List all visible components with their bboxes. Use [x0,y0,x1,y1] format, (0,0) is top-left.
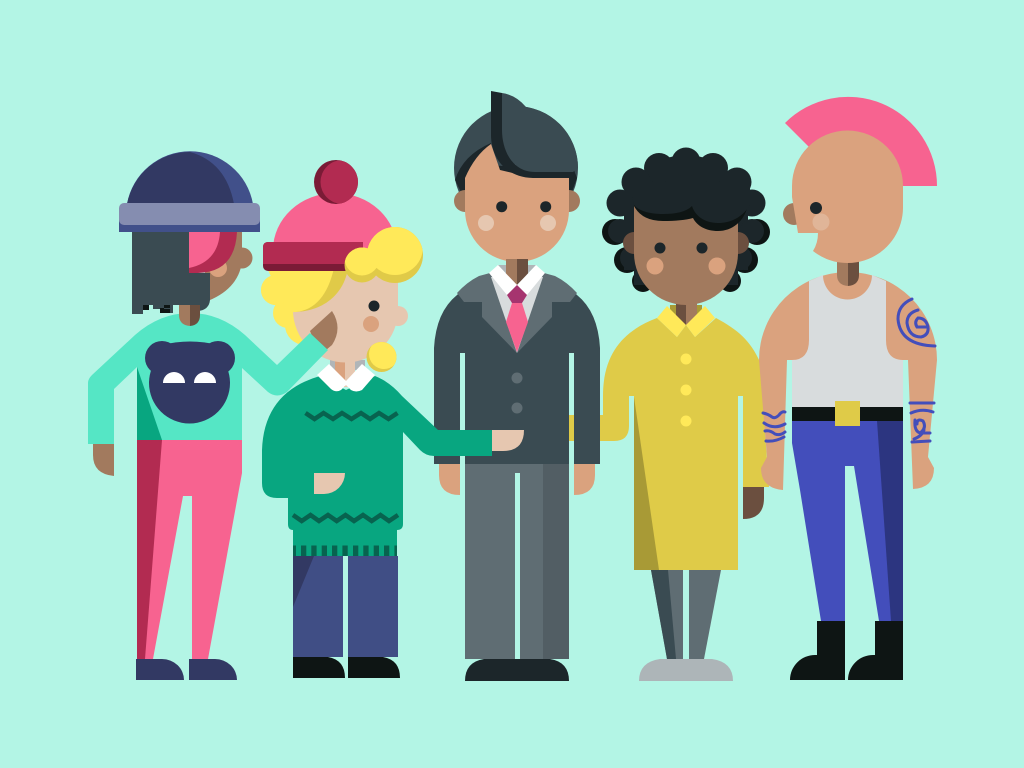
trousers [293,556,398,657]
cheeks [478,215,556,231]
beanie band [119,203,260,232]
illustration: five characters [88,91,937,681]
hand on face [310,311,338,355]
lapels [457,273,577,353]
sweater hem stripes [293,546,397,556]
skin: shoulders and arms [759,272,937,490]
shoes [639,659,733,681]
neck [179,305,200,326]
tattoo: shoulder spiral [898,299,935,346]
face [465,144,569,262]
coat shadow [634,397,659,570]
outstretched hand [492,430,524,451]
right hair curls [344,227,423,283]
belt [792,407,903,421]
eyes [654,242,708,254]
boots [790,621,903,680]
tie [506,285,528,352]
hat band [263,242,363,271]
legs [651,570,721,659]
shoes [293,657,400,678]
shirt collar [317,364,375,392]
ears [623,232,749,254]
trousers [792,421,903,621]
jacket [434,273,600,464]
pink hair streak [189,232,237,273]
character 2: blonde person in green sweater [261,160,524,678]
eyes [496,201,551,212]
shoes [136,659,237,680]
neck [837,258,859,286]
eye [810,202,822,214]
hands [439,463,595,495]
shoes [465,659,569,681]
neck [498,259,536,285]
cheeks [646,258,726,274]
trouser shadow [137,440,162,659]
eye [368,300,380,312]
hair back [454,106,578,230]
tank top [792,275,903,407]
character 4: woman in yellow coat [569,148,770,681]
ears [454,190,580,212]
buttons [680,354,692,426]
beanie dome [127,151,253,204]
neck and collar back [670,300,702,326]
character 1: person with beanie and bear sweater [88,151,338,680]
hat dome [273,193,397,250]
bear print [145,341,235,424]
curly hair back [602,148,770,292]
hair front [261,268,348,312]
trousers [465,463,569,659]
face [634,200,738,305]
hat pompom [314,160,358,204]
fringe [630,185,750,231]
ear [232,248,252,268]
quiff [491,91,578,178]
ear [388,306,408,326]
zigzag pattern top [306,413,398,419]
trouser shadow [877,421,903,621]
neck [330,355,365,387]
tattoo: left forearm waves [763,412,785,441]
dark hair [132,232,210,314]
zigzag pattern bottom [293,515,398,521]
mint sweater [88,313,328,444]
collar [657,306,715,337]
cheek [812,214,830,230]
character 3: man in suit [434,91,600,681]
ear [783,203,805,225]
yellow coat [569,318,769,570]
pink trousers [137,440,242,659]
face [293,271,398,363]
hand [743,487,764,519]
shirt collar [489,265,545,295]
shirt [491,277,543,353]
belt buckle [835,401,860,426]
cheek [209,259,227,277]
face side [205,232,242,302]
hand in pocket [314,473,345,494]
hair underside [455,143,577,200]
sweater [262,376,492,556]
jacket buttons [512,372,522,414]
hand lower [93,444,114,476]
sweater shadow [137,367,162,440]
character 5: punk with mohawk [759,97,937,680]
cheek [363,316,379,332]
mohawk [785,97,937,186]
tattoo: right forearm [910,403,934,442]
back hair [261,268,340,345]
head [792,131,903,263]
hair bun [366,342,396,372]
